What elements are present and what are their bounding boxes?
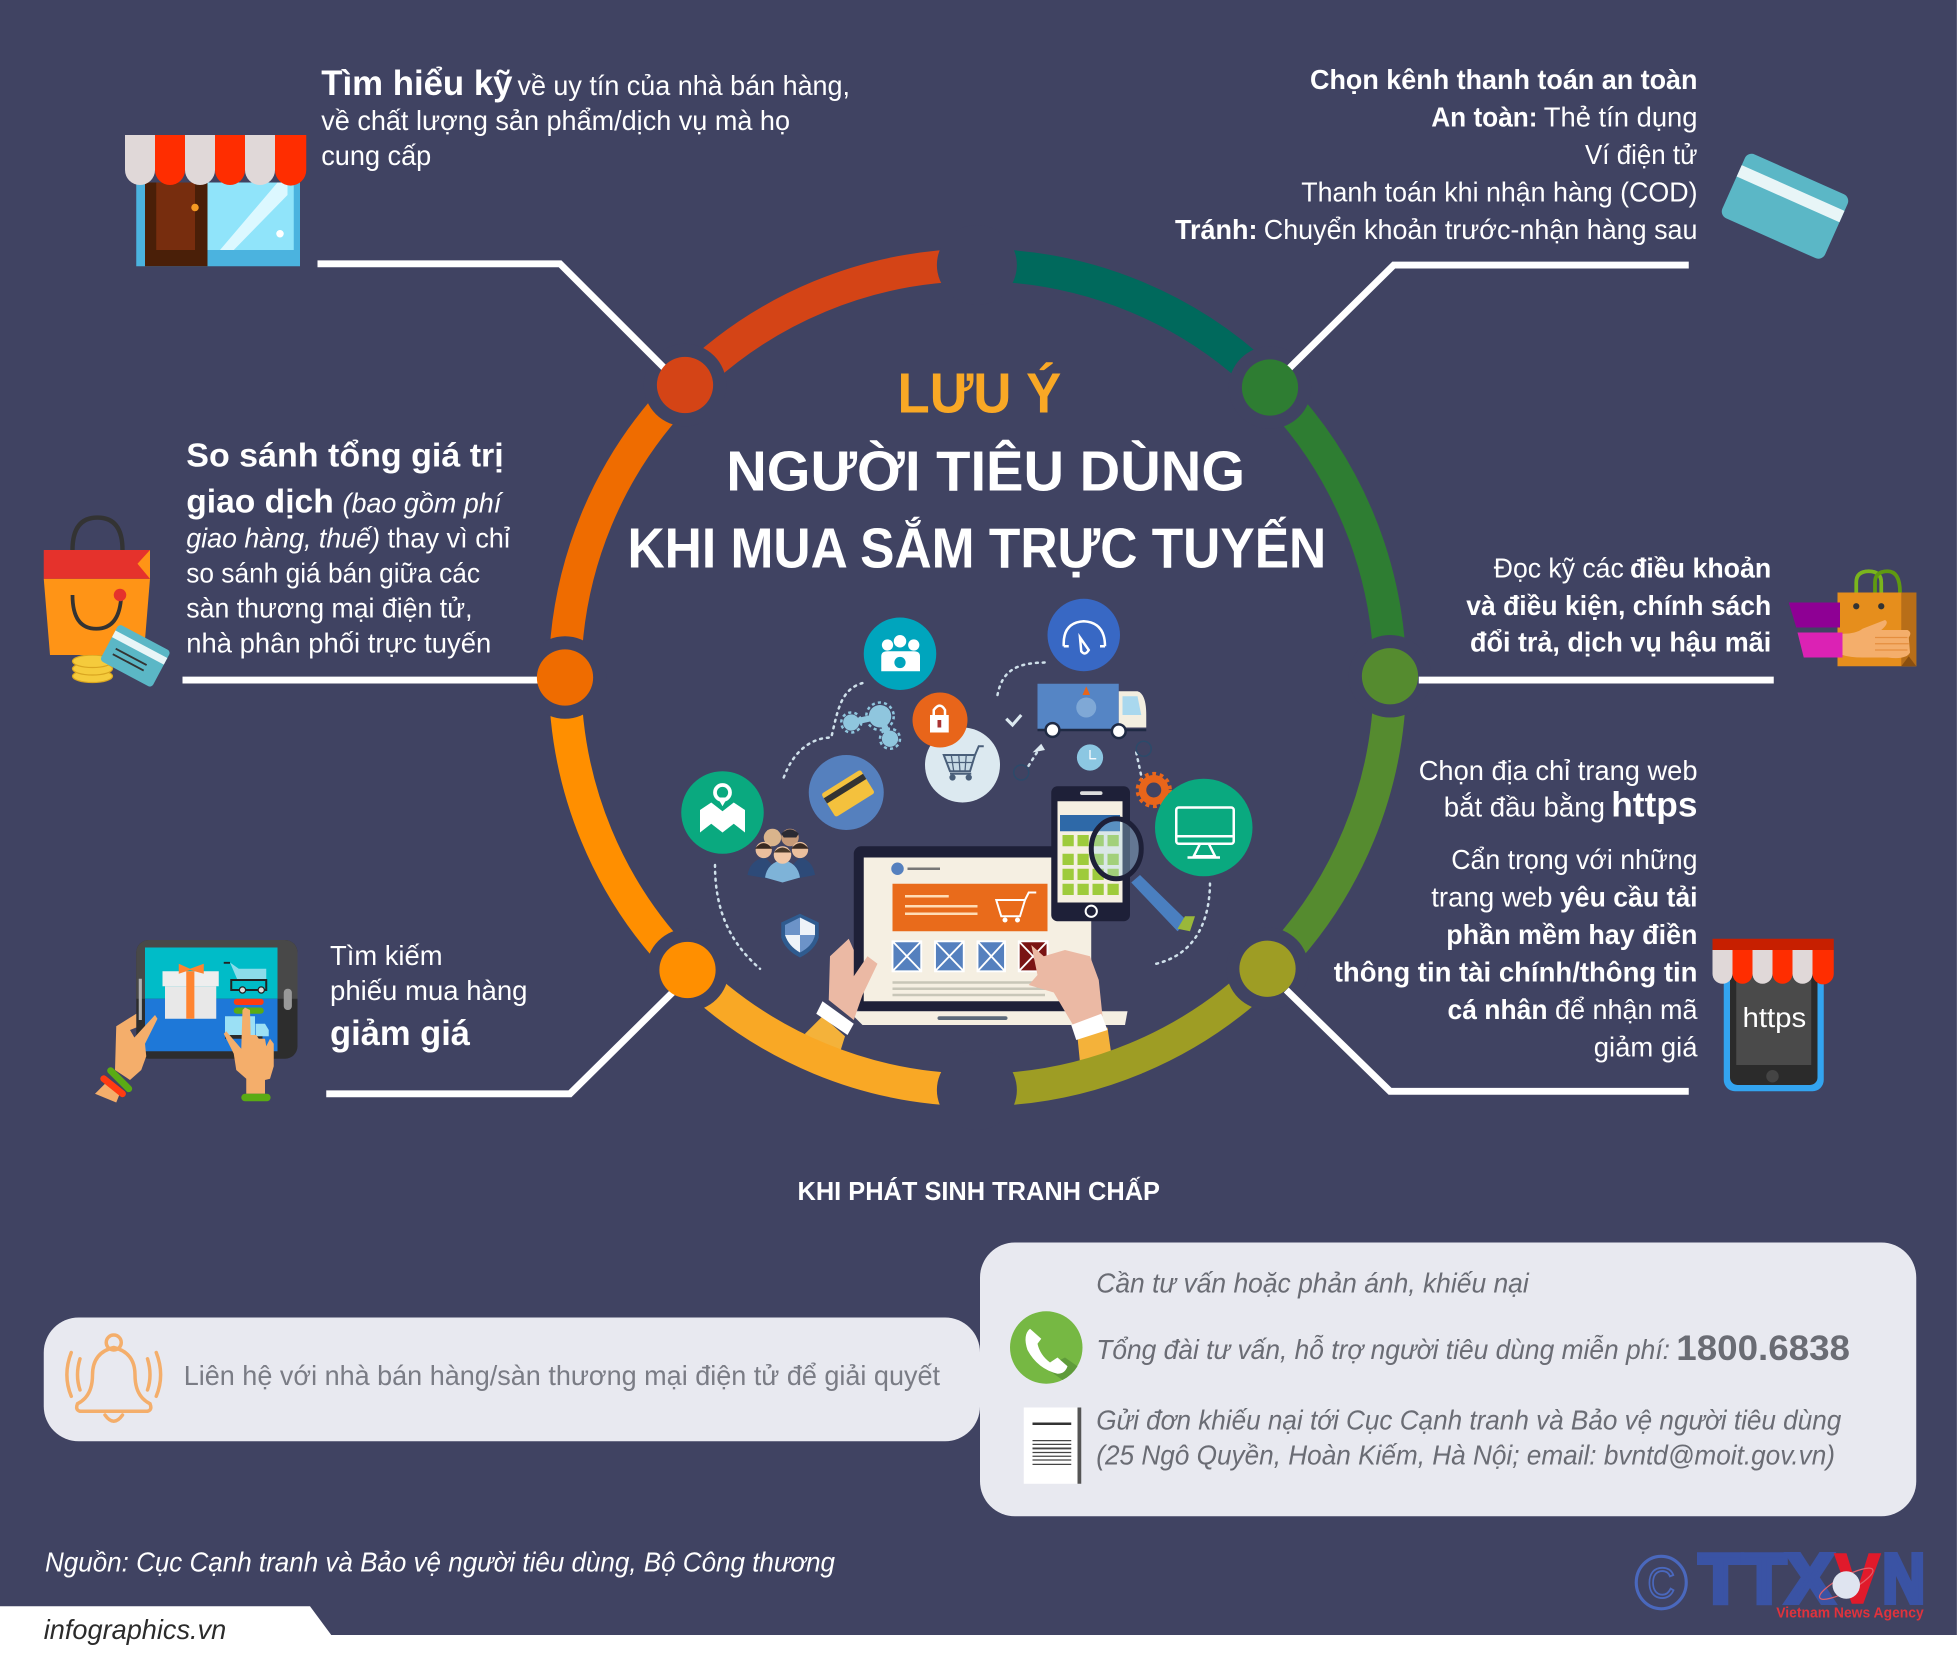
text: research the seller bbox=[321, 64, 850, 171]
text: compare total price: (bao gồm phí bbox=[343, 487, 504, 518]
title: NGƯỜI TIÊU DÙNG bbox=[726, 440, 1245, 503]
ring arc: top right bbox=[978, 265, 1269, 386]
dotted connector lines bbox=[715, 662, 1210, 969]
text: beware of sites asking for data: phần mềm hay điền bbox=[1446, 919, 1698, 950]
text: check https bbox=[1419, 755, 1698, 824]
icon: ringing bell bbox=[67, 1335, 161, 1421]
logo: TTXVN: C bbox=[1648, 1561, 1675, 1608]
text: safe payment: Chuyển khoản trước-nhận hàng sau bbox=[1264, 214, 1698, 245]
text: beware of sites asking for data bbox=[1334, 844, 1698, 1062]
text: safe payment: Tránh: bbox=[1175, 214, 1258, 245]
icon: storefront bbox=[125, 135, 306, 266]
icon: delivery truck bbox=[1038, 684, 1146, 738]
icon: shopping bag with card bbox=[44, 518, 171, 688]
icon: monitor circle bbox=[1155, 779, 1252, 876]
text: beware of sites asking for data: giảm giá bbox=[1594, 1031, 1698, 1062]
logo: TTXVN: V bbox=[1835, 1539, 1880, 1617]
icon: https phone shop: https bbox=[1743, 1002, 1806, 1033]
panel: hotline and complaint: 1800.6838 bbox=[1676, 1329, 1850, 1368]
text: discount vouchers: phiếu mua hàng bbox=[330, 975, 528, 1006]
panel: hotline and complaint: Tổng đài tư vấn, hỗ trợ người tiêu dùng miễn phí: bbox=[1096, 1334, 1670, 1365]
ring arc: bottom right bbox=[978, 969, 1269, 1090]
icon: document bbox=[1024, 1408, 1081, 1484]
text: beware of sites asking for data: cá nhân bbox=[1448, 994, 1548, 1025]
icon: left hand bbox=[805, 939, 878, 1056]
logo: TTXVN: Vietnam News Agency bbox=[1776, 1604, 1924, 1621]
text: beware of sites asking for data: để nhận mã bbox=[1555, 994, 1698, 1025]
text: read the terms bbox=[1466, 552, 1771, 657]
text: compare total price: giao dịch bbox=[186, 482, 334, 520]
icon: cart circle bbox=[925, 728, 1000, 802]
source: Nguồn: Cục Cạnh tranh và Bảo vệ người tiêu dùng, Bộ Công thương bbox=[45, 1546, 835, 1577]
icon: smartphone bbox=[1051, 786, 1130, 921]
text: read the terms: và điều kiện, chính sách bbox=[1466, 590, 1771, 621]
logo: TTXVN bbox=[1636, 1540, 1925, 1621]
text: beware of sites asking for data: Cẩn trọng với những bbox=[1451, 844, 1698, 875]
icon: laptop bbox=[849, 846, 1128, 1025]
footer tab bbox=[0, 1606, 1958, 1653]
text: check https: https bbox=[1611, 785, 1698, 824]
logo: TTXVN: TTX bbox=[1699, 1539, 1834, 1617]
footer tab: infographics.vn bbox=[44, 1614, 226, 1645]
ring arc: right upper bbox=[1269, 386, 1390, 678]
text: check https: bắt đầu bằng bbox=[1444, 791, 1605, 822]
icon: hand holding bag bbox=[1789, 571, 1916, 666]
ring arc: bottom left bbox=[686, 969, 978, 1090]
text: read the terms: đổi trả, dịch vụ hậu mãi bbox=[1470, 626, 1771, 657]
icon: lock circle bbox=[913, 692, 968, 748]
ring arc: top left bbox=[686, 265, 978, 386]
text: beware of sites asking for data: yêu cầu tải bbox=[1560, 881, 1698, 912]
panel: hotline and complaint: Cần tư vấn hoặc phản ánh, khiếu nại bbox=[1096, 1267, 1529, 1298]
text: compare total price: nhà phân phối trực tuyến bbox=[186, 627, 491, 658]
heading: disputes: KHI PHÁT SINH TRANH CHẤP bbox=[798, 1176, 1160, 1206]
text: beware of sites asking for data: thông tin tài chính/thông tin bbox=[1334, 956, 1698, 987]
text: safe payment: Chọn kênh thanh toán an toàn bbox=[1310, 64, 1698, 95]
logo: TTXVN: N bbox=[1883, 1539, 1925, 1617]
icon: people circle bbox=[864, 618, 936, 690]
text: compare total price bbox=[186, 436, 511, 658]
text: check https: Chọn địa chỉ trang web bbox=[1419, 755, 1698, 786]
text: research the seller: về uy tín của nhà bán hàng, bbox=[518, 70, 850, 101]
text: research the seller: cung cấp bbox=[321, 140, 431, 171]
icon: gauge circle bbox=[1048, 599, 1120, 671]
text: safe payment: Thanh toán khi nhận hàng (COD) bbox=[1301, 176, 1698, 207]
text: compare total price: so sánh giá bán giữa các bbox=[186, 557, 480, 588]
text: discount vouchers: giảm giá bbox=[330, 1014, 471, 1053]
text: read the terms: Đọc kỹ các bbox=[1494, 552, 1624, 583]
title: KHI MUA SẮM TRỰC TUYẾN bbox=[628, 517, 1326, 580]
text: research the seller: Tìm hiểu kỹ bbox=[321, 64, 513, 103]
text: safe payment: An toàn: bbox=[1431, 101, 1538, 132]
central illustration: online shopping bbox=[681, 599, 1252, 1062]
text: safe payment: Ví điện tử bbox=[1585, 139, 1698, 170]
text: beware of sites asking for data: trang web bbox=[1431, 881, 1553, 912]
icon: tablet with gift bbox=[95, 940, 298, 1102]
icon: map circle bbox=[681, 771, 764, 854]
icon: small arrow bbox=[1032, 744, 1045, 752]
icon: https phone shop bbox=[1712, 939, 1834, 1091]
panel: hotline and complaint: (25 Ngô Quyền, Hoàn Kiếm, Hà Nội; email: bvntd@moit.gov.vn) bbox=[1096, 1439, 1835, 1470]
icon: credit card circle bbox=[809, 755, 884, 830]
icon: phone bbox=[1010, 1311, 1082, 1384]
text: compare total price: So sánh tổng giá trị bbox=[186, 436, 504, 474]
icon: payment card bbox=[1719, 151, 1851, 261]
text: compare total price: giao hàng, thuế) bbox=[186, 522, 380, 553]
icon: right hand bbox=[1029, 945, 1112, 1062]
panel: hotline and complaint: Gửi đơn khiếu nại tới Cục Cạnh tranh và Bảo vệ người tiêu dùng bbox=[1096, 1404, 1842, 1435]
text: compare total price: sàn thương mại điện tử, bbox=[186, 592, 473, 623]
icon: shield bbox=[781, 914, 819, 958]
panel: contact seller bbox=[44, 1318, 980, 1441]
circular ring bbox=[565, 265, 1390, 1090]
icon: small node circles bbox=[1014, 741, 1151, 780]
text: discount vouchers: Tìm kiếm bbox=[330, 940, 443, 971]
ring arc: left lower bbox=[565, 678, 686, 969]
icon: gears bbox=[841, 702, 900, 749]
title: LƯU Ý bbox=[898, 362, 1061, 425]
text: read the terms: điều khoản bbox=[1630, 552, 1771, 583]
icon: magnifier bbox=[1091, 819, 1195, 931]
icon: gear bbox=[1138, 774, 1170, 806]
ring nodes bbox=[537, 357, 1418, 998]
ring arc: right lower bbox=[1269, 678, 1390, 969]
icon: business people bbox=[748, 829, 815, 882]
icon: clock bbox=[1077, 744, 1103, 771]
text: safe payment: Thẻ tín dụng bbox=[1544, 101, 1698, 132]
text: discount vouchers bbox=[330, 940, 528, 1053]
text: safe payment bbox=[1175, 64, 1698, 245]
icon: check mark bbox=[1006, 715, 1021, 725]
connector lines bbox=[183, 264, 1774, 1094]
text: research the seller: về chất lượng sản phẩm/dịch vụ mà họ bbox=[321, 105, 790, 136]
panel: hotline and complaint bbox=[980, 1242, 1916, 1516]
ring arc: left upper bbox=[565, 386, 686, 678]
title bbox=[628, 362, 1326, 580]
text: compare total price: thay vì chỉ bbox=[388, 522, 511, 553]
panel: contact seller: Liên hệ với nhà bán hàng/sàn thương mại điện tử để giải quyết bbox=[184, 1360, 940, 1391]
